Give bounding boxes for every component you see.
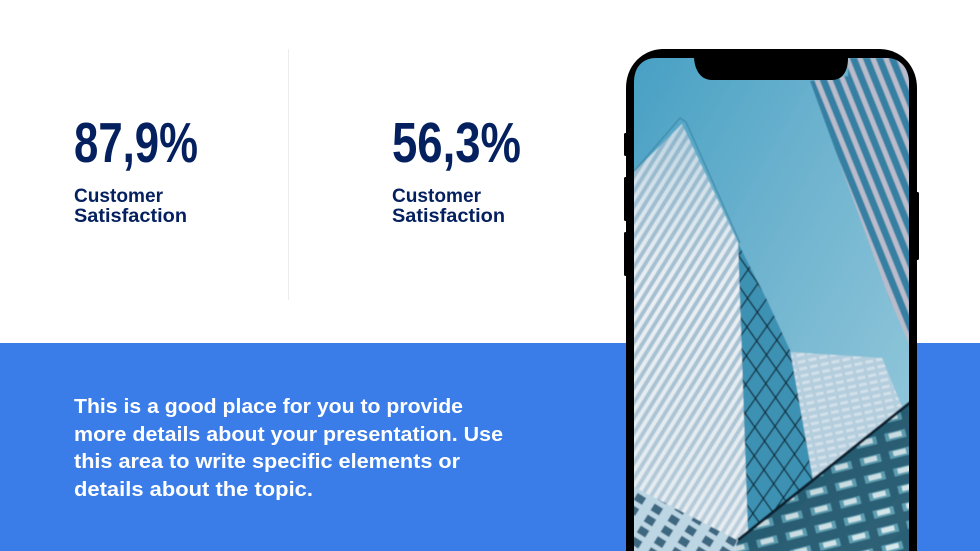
- dark glass facade: [738, 243, 813, 535]
- phone body: [626, 49, 917, 551]
- left white tower: [630, 118, 748, 551]
- statistic: 87,9% customer satisfaction: [74, 111, 198, 227]
- phone mockup: [624, 49, 919, 551]
- statistic: 56,3% customer satisfaction: Satisfaction: [392, 205, 505, 227]
- statistic: 56,3% customer satisfaction: [392, 111, 521, 227]
- phone screen photo of buildings: [630, 54, 913, 551]
- statistic: 56,3% customer satisfaction: 56,3%: [392, 111, 521, 175]
- back building: [790, 352, 902, 480]
- description text block: this area to write specific elements or: [74, 450, 460, 473]
- lower right dark building: [733, 401, 912, 551]
- description text block: more details about your presentation. Use: [74, 423, 503, 446]
- phone side buttons: [624, 133, 919, 276]
- statistic: 87,9% customer satisfaction: 87,9%: [74, 111, 198, 175]
- description text block: [74, 395, 503, 501]
- blue bottom band: [0, 343, 980, 551]
- statistic: 87,9% customer satisfaction: Customer: [74, 185, 163, 207]
- description text block: This is a good place for you to provide: [74, 395, 463, 418]
- right tower: [810, 58, 912, 350]
- statistic: 87,9% customer satisfaction: Satisfaction: [74, 205, 187, 227]
- description text block: details about the topic.: [74, 478, 313, 501]
- statistic: 56,3% customer satisfaction: Customer: [392, 185, 481, 207]
